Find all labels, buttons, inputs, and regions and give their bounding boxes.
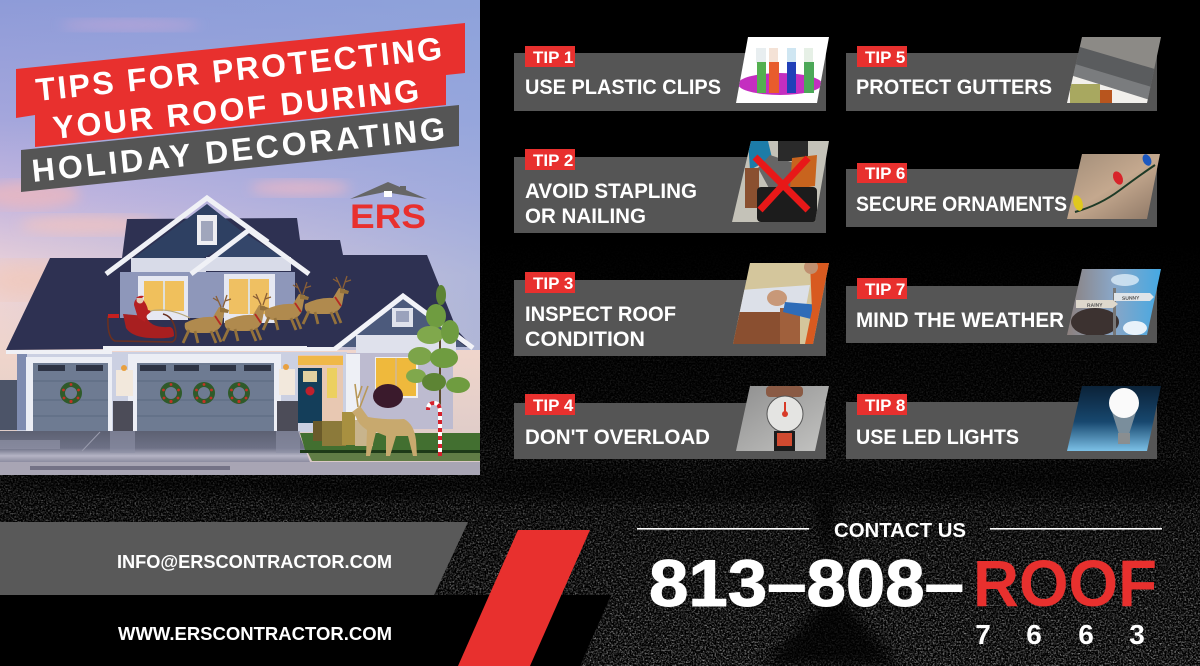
distant neighbourhood — [0, 380, 18, 430]
badge — [525, 46, 575, 67]
panel — [846, 169, 1157, 227]
tree — [406, 285, 470, 410]
label: TIP 7 — [865, 280, 905, 299]
heading: AVOID STAPLING — [525, 179, 697, 203]
label: TIP 1 — [533, 48, 573, 67]
heading: USE PLASTIC CLIPS — [525, 75, 721, 99]
gable window — [197, 215, 217, 245]
golden deer — [352, 384, 417, 456]
gift boxes — [313, 412, 373, 446]
badge — [857, 46, 907, 67]
title banner: gray — [21, 105, 459, 192]
panel — [514, 53, 826, 111]
keypad digits: 3 — [1129, 619, 1145, 650]
rule left — [637, 528, 809, 530]
label: TIP 2 — [533, 151, 573, 170]
image: weather signpost: SUNNY — [1122, 295, 1140, 302]
email address: INFO@ERSCONTRACTOR.COM — [117, 552, 392, 572]
lawn — [300, 433, 480, 461]
heading line 2: CONDITION — [525, 327, 645, 351]
badge — [525, 149, 575, 170]
tip 8 — [846, 386, 1165, 459]
garage door right — [128, 354, 281, 432]
label: TIP 5 — [865, 48, 905, 67]
title line 2: YOUR ROOF DURING — [51, 72, 421, 146]
stone pillars and lights — [113, 364, 298, 431]
badge — [525, 394, 575, 415]
reindeer — [183, 276, 351, 343]
eaves — [6, 346, 337, 354]
title line 1: TIPS FOR PROTECTING — [34, 30, 444, 108]
footer band: website — [0, 595, 611, 666]
tip 6 — [846, 153, 1165, 227]
badge — [857, 394, 907, 415]
label: TIP 3 — [533, 274, 573, 293]
tip 5 — [846, 37, 1165, 111]
upper storey wall — [120, 204, 300, 346]
tip 3 — [514, 260, 830, 356]
logo: ERS: ERS — [350, 198, 426, 236]
shrub — [373, 384, 403, 408]
image: crossed-out staple gun — [730, 141, 830, 222]
website address: WWW.ERSCONTRACTOR.COM — [118, 624, 392, 644]
image: weather signpost: RAINY — [1087, 302, 1103, 309]
street — [0, 462, 480, 475]
title banner: red — [16, 23, 465, 147]
image: LED bulb — [1067, 386, 1161, 451]
image: roof inspection — [730, 260, 830, 344]
image: plastic clips — [730, 37, 830, 103]
panel — [514, 403, 826, 459]
label: TIP 8 — [865, 396, 905, 415]
right gable wing — [335, 296, 473, 429]
rule right — [990, 528, 1162, 530]
tip 2 — [514, 141, 830, 233]
lower walls — [17, 352, 347, 432]
candy cane — [428, 403, 440, 456]
photo: decorated house at dusk — [0, 0, 480, 475]
upper windows — [138, 274, 275, 323]
panel — [846, 53, 1157, 111]
heading: USE LED LIGHTS — [856, 425, 1019, 449]
tip 7 — [846, 269, 1165, 343]
panel — [514, 280, 826, 356]
badge — [857, 163, 907, 183]
phone number: 813–808– — [649, 546, 964, 620]
tip 1 — [514, 37, 830, 111]
image: weather signpost — [1067, 269, 1161, 335]
driveway — [0, 431, 310, 462]
heading: PROTECT GUTTERS — [856, 75, 1052, 99]
upper gable trim — [106, 198, 309, 274]
panel — [846, 402, 1157, 459]
garage door left — [26, 357, 112, 432]
keypad digits — [975, 619, 1145, 650]
image: gutter — [1067, 37, 1161, 103]
image: hanging scale — [730, 386, 830, 451]
phone word: ROOF — [973, 546, 1157, 620]
panel — [514, 157, 826, 233]
keypad digits: 6 — [1078, 619, 1094, 650]
porch and front door — [298, 355, 343, 423]
sky — [0, 0, 480, 475]
label: TIP 4 — [533, 396, 574, 415]
heading: DON'T OVERLOAD — [525, 425, 710, 449]
red slanted accent — [458, 530, 590, 666]
badge — [525, 272, 575, 293]
main roof — [6, 218, 473, 350]
footer band: email — [0, 522, 468, 595]
logo: ERS — [350, 182, 427, 236]
image: roof lights — [1067, 154, 1160, 219]
keypad digits: 7 — [975, 619, 991, 650]
contact heading: CONTACT US — [834, 520, 966, 542]
sleigh with Santa — [108, 296, 190, 342]
tip 4 — [514, 386, 830, 459]
contact block — [637, 520, 1162, 650]
heading: SECURE ORNAMENTS — [856, 192, 1067, 216]
keypad digits: 6 — [1026, 619, 1042, 650]
heading: MIND THE WEATHER — [856, 308, 1064, 332]
badge — [857, 278, 907, 299]
label: TIP 6 — [865, 164, 905, 183]
heading line 2: OR NAILING — [525, 204, 646, 228]
panel — [846, 286, 1157, 343]
heading: INSPECT ROOF — [525, 302, 676, 326]
title line 3: HOLIDAY DECORATING — [30, 110, 447, 189]
